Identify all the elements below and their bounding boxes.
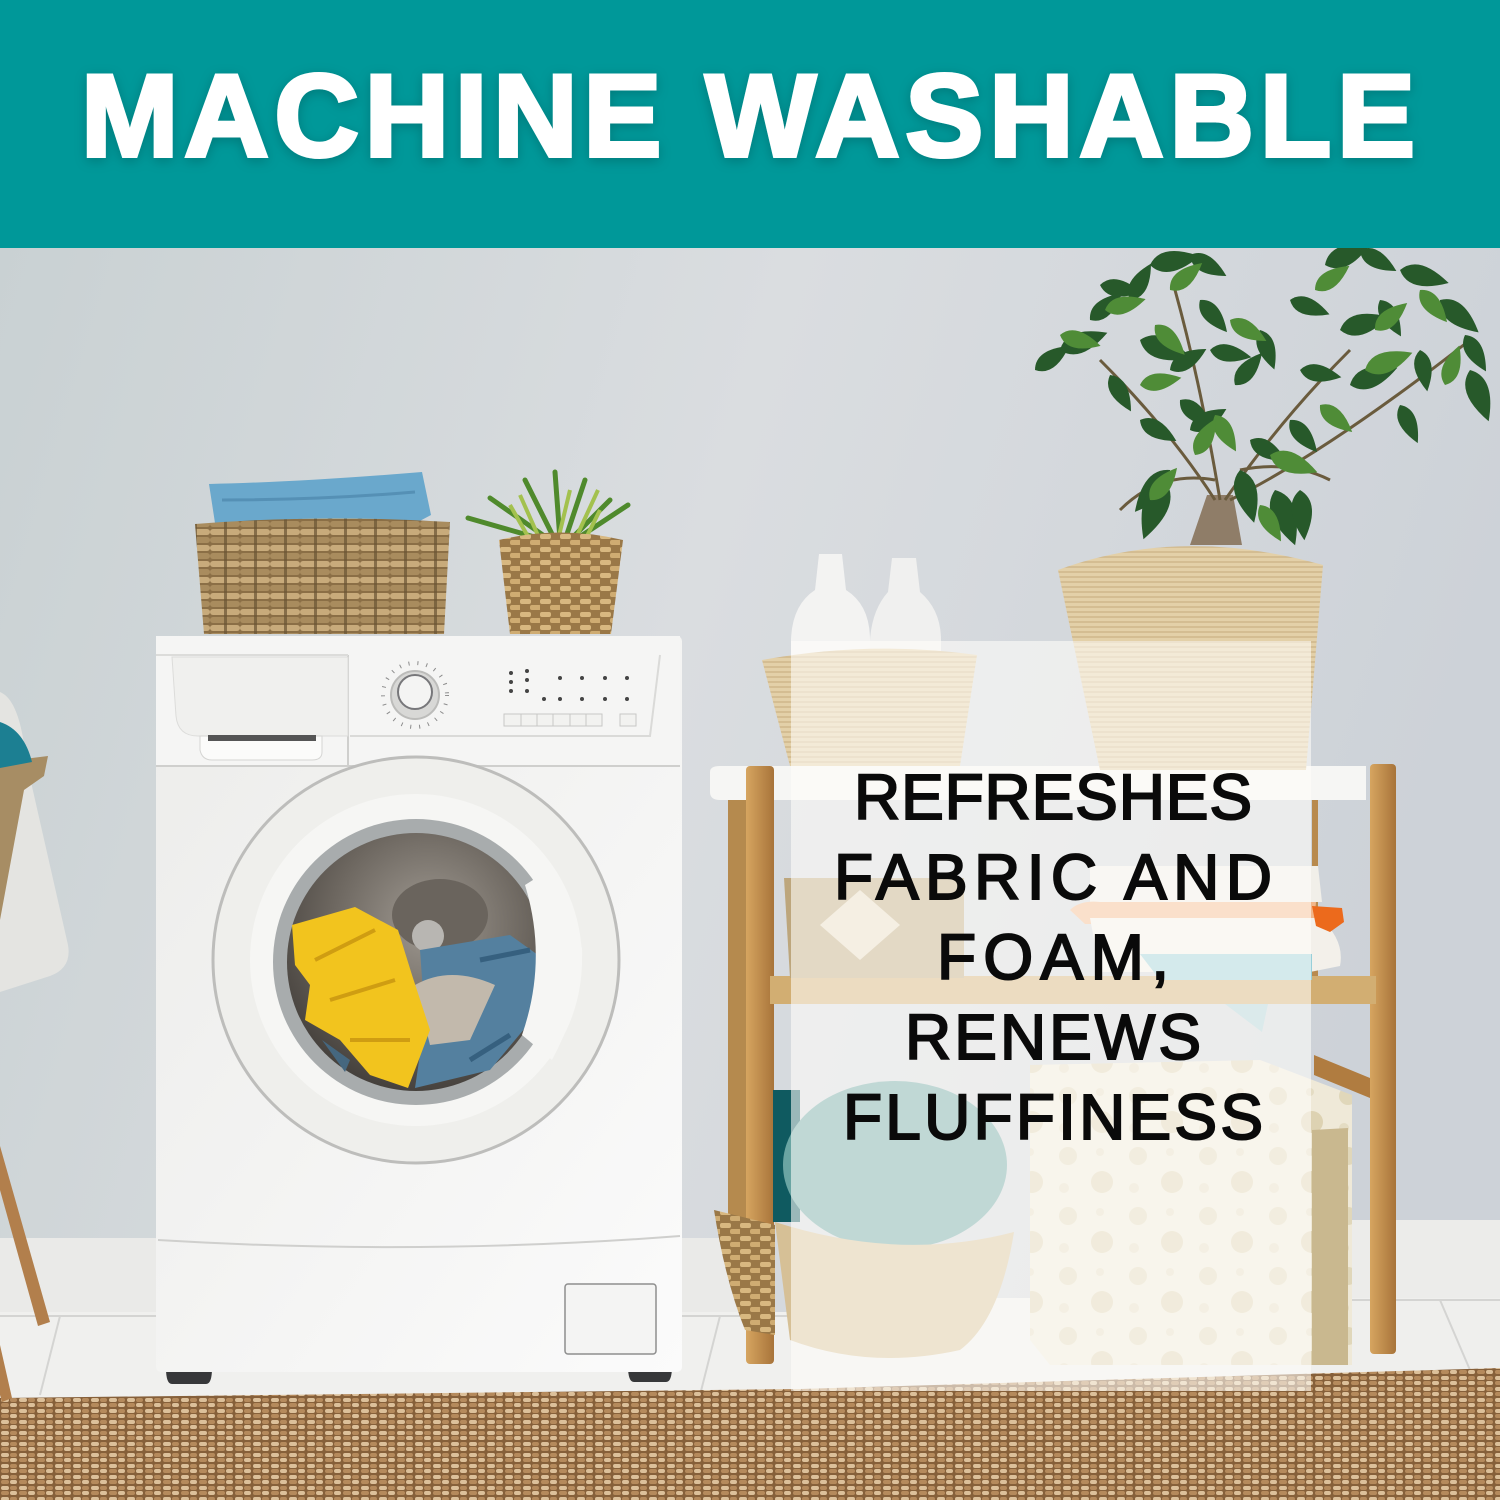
branches	[1100, 290, 1470, 510]
mid basket	[784, 878, 964, 978]
photo: chair at left edge	[0, 692, 69, 1402]
photo: small potted grass plant	[468, 472, 628, 634]
lower teal basket	[773, 1090, 800, 1222]
shelf top	[710, 766, 1366, 800]
translucent white overlay panel	[791, 641, 1311, 1391]
buttons	[504, 714, 636, 726]
yellow cloth	[292, 907, 430, 1088]
foliage light	[1058, 256, 1467, 546]
feature text: refreshes fabric and foam, renews fluffiness: FLUFFINESS	[843, 1081, 1263, 1153]
feature text: refreshes fabric and foam, renews fluffiness: REFRESHES	[854, 761, 1252, 833]
door glass highlight	[522, 868, 582, 1060]
indicator lights	[509, 669, 629, 701]
folded linens	[1090, 866, 1322, 902]
photo: large potted tree	[1030, 234, 1499, 770]
machine feet	[166, 1366, 672, 1384]
door	[213, 757, 619, 1163]
machine body	[156, 636, 682, 1372]
dial	[391, 671, 439, 719]
photo: washing machine	[156, 636, 682, 1384]
tree trunk	[1190, 495, 1242, 545]
photo: bamboo shelf with baskets and linens	[710, 649, 1396, 1365]
posts	[728, 800, 747, 1220]
lower straw basket	[714, 1210, 775, 1335]
title: MACHINE WASHABLE	[81, 50, 1415, 181]
middle rail	[770, 976, 1376, 1004]
header banner	[0, 0, 1500, 248]
feature text: refreshes fabric and foam, renews fluffiness: FOAM,	[937, 921, 1169, 993]
control panel	[156, 636, 680, 766]
photo: wicker basket with blue clothes	[195, 472, 450, 634]
photo: white detergent bottles	[791, 554, 941, 660]
feature text: refreshes fabric and foam, renews fluffiness: FABRIC AND	[834, 841, 1272, 913]
photo: woven rug	[0, 1368, 1500, 1500]
foliage dark	[1030, 234, 1499, 549]
lower kick panel	[158, 1236, 680, 1247]
feature text: refreshes fabric and foam, renews fluffiness	[834, 761, 1272, 1153]
left basket top shelf	[762, 649, 977, 766]
floral box	[1030, 1060, 1352, 1365]
jeans	[415, 935, 545, 1088]
straw pot	[1058, 546, 1323, 770]
feature text: refreshes fabric and foam, renews fluffiness: RENEWS	[905, 1001, 1201, 1073]
